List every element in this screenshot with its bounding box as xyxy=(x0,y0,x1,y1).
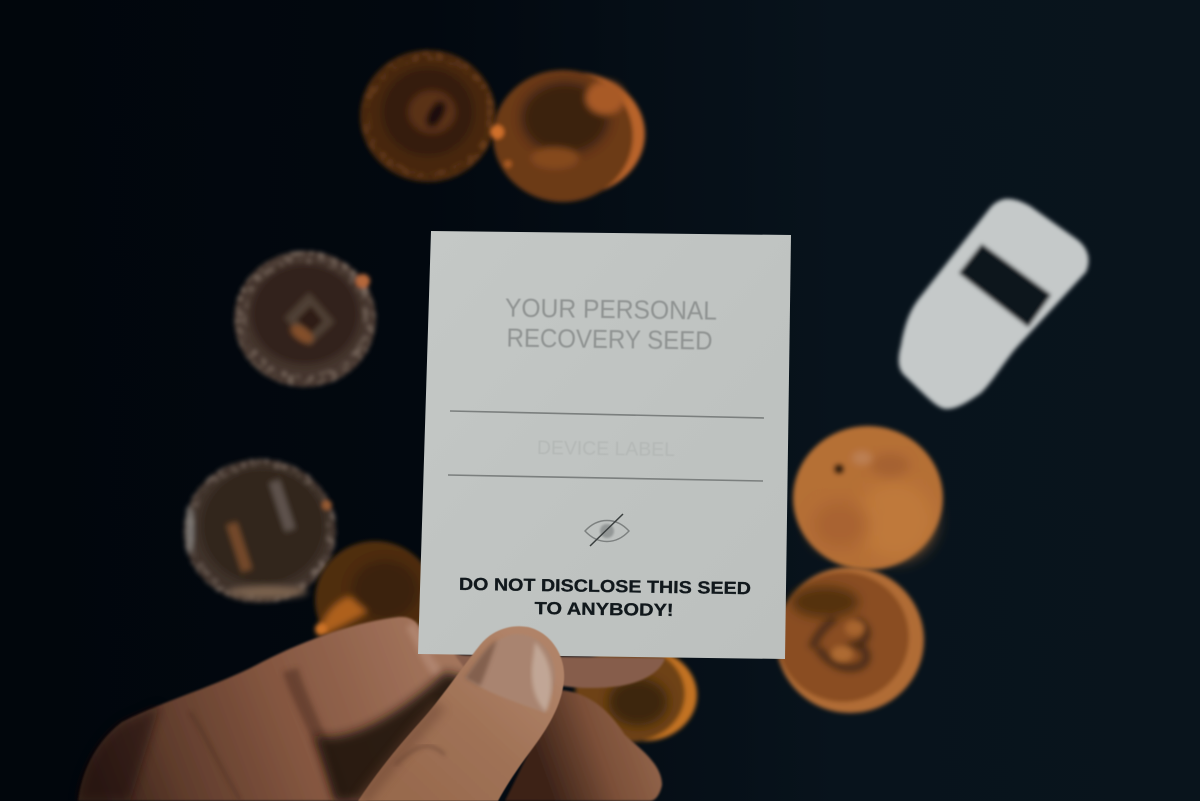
icon: crossed-out eye xyxy=(585,514,629,546)
warning text: TO ANYBODY! xyxy=(534,598,674,620)
hand: palm and index finger xyxy=(78,617,495,801)
device label: DEVICE LABEL xyxy=(537,438,675,461)
card heading: RECOVERY SEED xyxy=(506,325,713,356)
hand: fingertip right of thumb xyxy=(455,655,665,688)
hand: thumb xyxy=(358,626,564,801)
coin: silver left upper xyxy=(234,251,376,387)
coin: bottom behind fingers xyxy=(575,646,697,742)
card heading xyxy=(504,295,717,356)
recovery seed paper card xyxy=(418,231,791,659)
warning text xyxy=(458,574,751,621)
coin: lower left behind hand xyxy=(315,541,435,659)
coin: top left xyxy=(360,50,496,182)
thumb nail xyxy=(465,634,555,713)
warning text: DO NOT DISCLOSE THIS SEED xyxy=(459,574,751,598)
card heading: YOUR PERSONAL xyxy=(505,295,717,326)
hand: third finger xyxy=(505,690,662,801)
coin: silver left lower xyxy=(184,459,336,603)
coin: top right xyxy=(490,70,645,202)
coin: right lower bitcoin xyxy=(776,567,924,713)
hardware wallet device xyxy=(899,199,1089,409)
device screen xyxy=(960,245,1050,326)
coin: right upper orange xyxy=(793,426,943,570)
